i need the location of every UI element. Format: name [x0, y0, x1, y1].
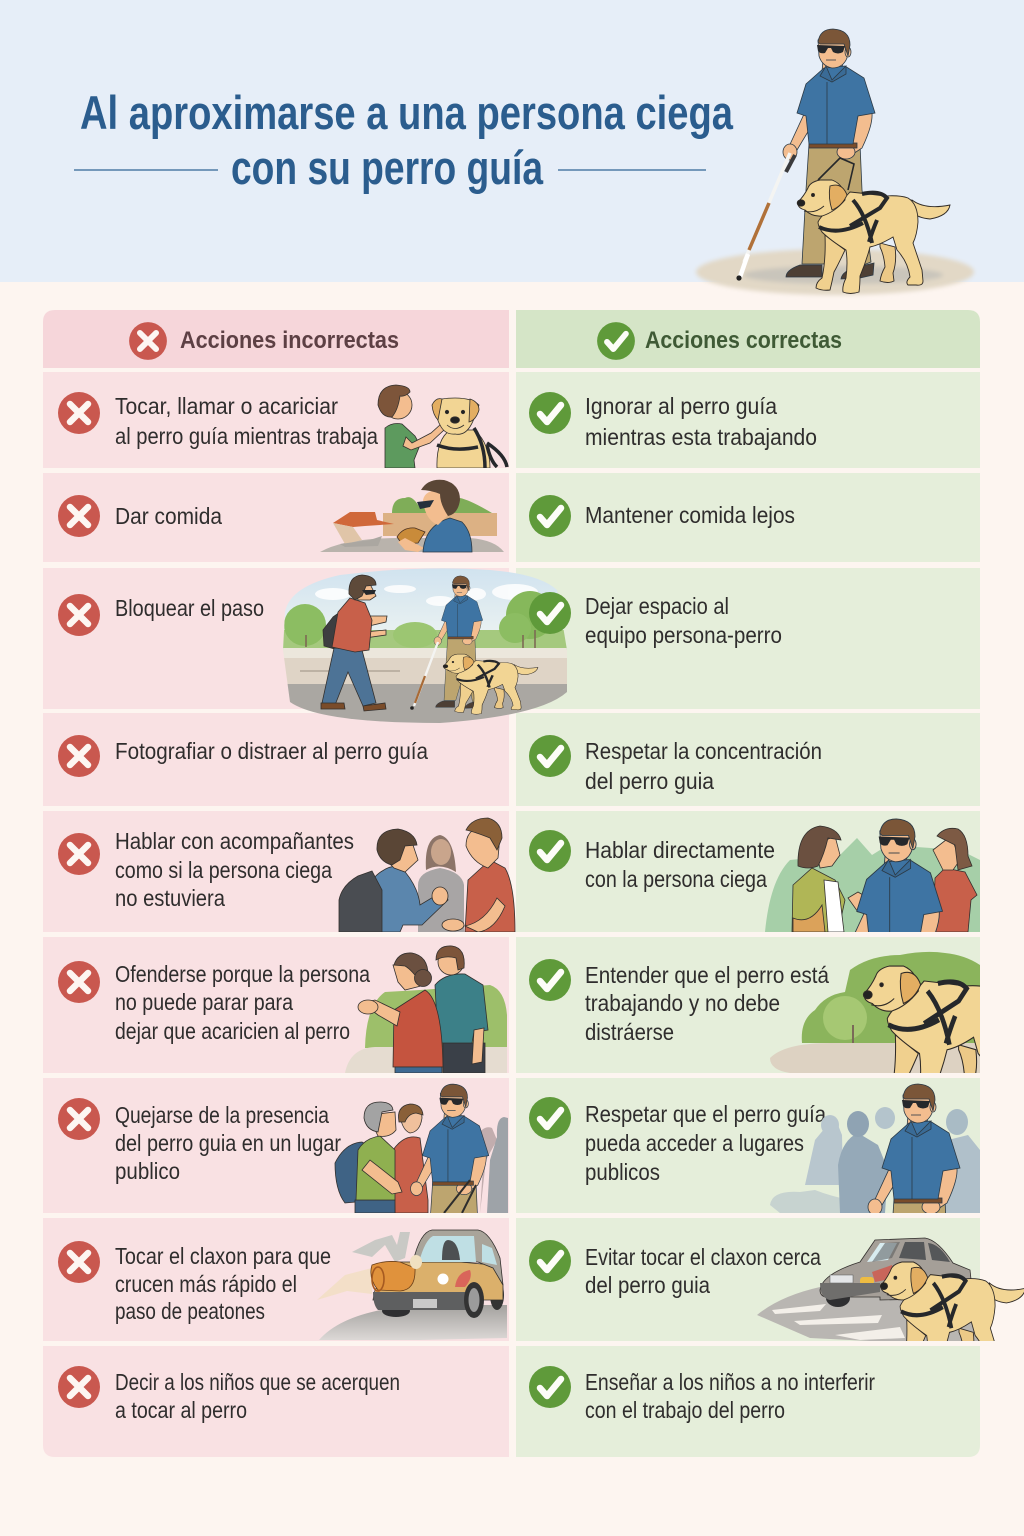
row 5: speaking directly: [516, 811, 980, 932]
title: con su perro guía: [231, 141, 544, 194]
heading: incorrect actions: [43, 310, 509, 368]
title: [74, 86, 734, 194]
row 8: honking the horn: Tocar el claxon para que: [115, 1243, 331, 1269]
row 9: telling children to touch: Decir a los niños que se acerquen: [115, 1369, 400, 1395]
row 5: talking to companions: no estuviera: [115, 885, 225, 911]
row 4: photographing: [43, 713, 509, 806]
panel: incorrect actions: [43, 310, 515, 1457]
row 8: avoid the horn: [516, 1218, 1024, 1341]
row 4: respecting concentration: Respetar la concentración: [585, 738, 822, 764]
icon: check over illustration, row 3: [529, 592, 571, 634]
row 4: photographing: Fotografiar o distraer al perro guía: [115, 738, 428, 764]
row 7: complaining about the dog: Quejarse de la presencia: [115, 1102, 329, 1128]
row 4: respecting concentration: [516, 713, 980, 806]
row 6: dog is working: distráerse: [585, 1019, 674, 1045]
row 1: touching the dog: [43, 372, 509, 468]
row 7: public access: [516, 1078, 980, 1213]
header band: [0, 0, 1024, 282]
row 1: ignoring the dog: mientras esta trabajando: [585, 424, 817, 450]
panel: correct actions: [516, 310, 1024, 1381]
row 5: talking to companions: Hablar con acompañantes: [115, 828, 354, 854]
row 8: honking the horn: paso de peatones: [115, 1298, 265, 1324]
row 6: taking offence: [43, 937, 509, 1073]
panel: last correct row: [516, 1346, 980, 1457]
panel: last correct row: Enseñar a los niños a no interferir: [585, 1369, 875, 1395]
title: Al aproximarse a una persona ciega: [80, 86, 734, 139]
row 7: complaining about the dog: del perro guia en un lugar: [115, 1130, 341, 1156]
row 6: taking offence: dejar que acaricien al perro: [115, 1018, 350, 1044]
row 1: touching the dog: Tocar, llamar o acariciar: [115, 393, 338, 419]
illustration: person blocking the way of the team: [280, 565, 570, 724]
row 8: honking the horn: crucen más rápido el: [115, 1271, 297, 1297]
row 1: ignoring the dog: [516, 372, 980, 468]
row 6: dog is working: [516, 937, 980, 1073]
panel: last correct row: con el trabajo del perro: [585, 1397, 785, 1423]
row 6: taking offence: Ofenderse porque la persona: [115, 961, 370, 987]
row 3: blocking the way: [43, 568, 509, 709]
row 6: dog is working: Entender que el perro está: [585, 962, 829, 988]
illustration: blind man with cane and guide dog: [696, 29, 974, 295]
row 5: talking to companions: [43, 811, 515, 932]
row 6: dog is working: trabajando y no debe: [585, 990, 780, 1016]
row 4: respecting concentration: del perro guia: [585, 768, 714, 794]
row 9: telling children to touch: [43, 1346, 509, 1457]
row 9: telling children to touch: a tocar al perro: [115, 1397, 247, 1423]
row 7: public access: pueda acceder a lugares: [585, 1130, 804, 1156]
heading: incorrect actions: Acciones incorrectas: [180, 327, 399, 354]
row 3: leaving space: [516, 568, 980, 709]
row 6: taking offence: no puede parar para: [115, 989, 293, 1015]
row 3: leaving space: Dejar espacio al: [585, 593, 729, 619]
row 1: touching the dog: al perro guía mientras trabaja: [115, 423, 378, 449]
row 3: blocking the way: Bloquear el paso: [115, 595, 264, 621]
row 2: giving food: Dar comida: [115, 503, 222, 529]
row 2: keeping food away: Mantener comida lejos: [585, 502, 795, 528]
row 3: leaving space: equipo persona-perro: [585, 622, 782, 648]
row 1: ignoring the dog: Ignorar al perro guía: [585, 393, 777, 419]
row 7: complaining about the dog: [43, 1078, 509, 1213]
row 8: avoid the horn: del perro guia: [585, 1272, 710, 1298]
row 5: speaking directly: Hablar directamente: [585, 837, 775, 863]
illustration: dog beside crossing: [880, 1262, 1024, 1341]
row 7: public access: Respetar que el perro guía: [585, 1101, 826, 1127]
row 7: public access: publicos: [585, 1159, 660, 1185]
row 7: complaining about the dog: publico: [115, 1158, 180, 1184]
row 5: talking to companions: como si la persona ciega: [115, 857, 332, 883]
heading: correct actions: [516, 310, 980, 368]
row 2: giving food: [43, 473, 509, 562]
heading: correct actions: Acciones correctas: [645, 327, 842, 354]
row 8: avoid the horn: Evitar tocar el claxon cerca: [585, 1244, 821, 1270]
row 8: honking the horn: [43, 1218, 509, 1341]
row 2: keeping food away: [516, 473, 980, 562]
row 5: speaking directly: con la persona ciega: [585, 866, 767, 892]
